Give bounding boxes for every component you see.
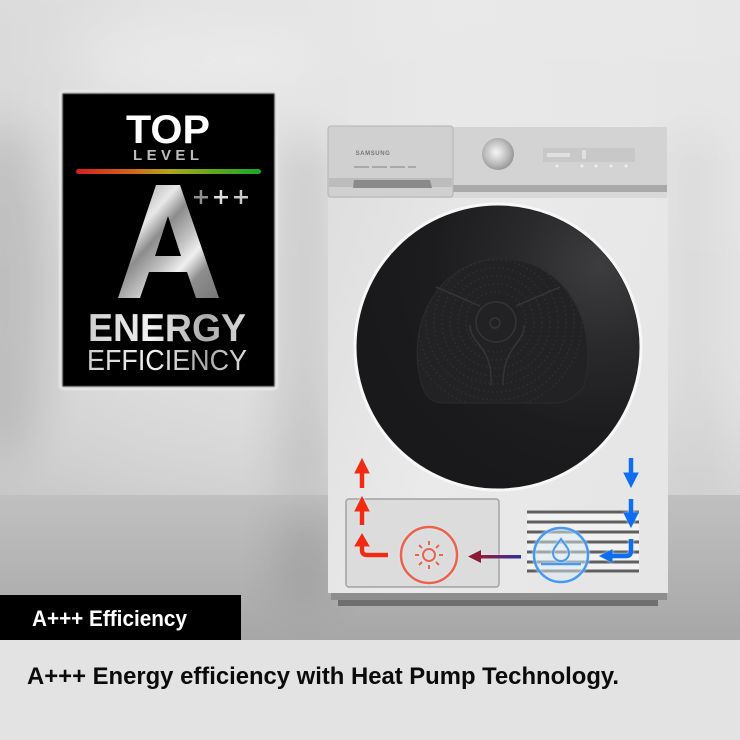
display [543,148,635,162]
vent lines [527,510,639,573]
dial [482,138,514,170]
detergent drawer handle [353,180,432,188]
caption text: A+++ Energy efficiency with Heat Pump Technology. [27,663,619,690]
silver letter A [118,185,219,298]
red arrows [355,459,388,555]
heat icon [401,527,457,583]
floor [0,495,740,641]
caption panel [0,640,740,740]
plus signs [194,190,248,204]
dryer [328,126,668,606]
wall background [0,0,740,496]
badge label: EFFICIENCY: EFFICIENCY [87,345,247,377]
black tag: A+++ Efficiency [0,595,241,640]
drum interior [416,260,586,404]
control panel [328,126,667,198]
indicator dots [556,164,628,168]
badge title: TOP: TOP [126,108,210,152]
dryer base [331,592,667,606]
blue arrows [600,458,638,562]
black tag: A+++ Efficiency: A+++ Efficiency [32,606,188,631]
transfer arrow [468,550,521,563]
water icon [534,528,588,582]
energy gradient bar [76,169,261,174]
brand label: SAMSUNG [356,151,390,157]
badge label: ENERGY: ENERGY [88,307,246,350]
badge subtitle: LEVEL: LEVEL [133,147,199,164]
dryer body [328,196,668,593]
heat pump compartment [346,499,499,587]
door [355,204,641,490]
energy badge [60,92,276,388]
